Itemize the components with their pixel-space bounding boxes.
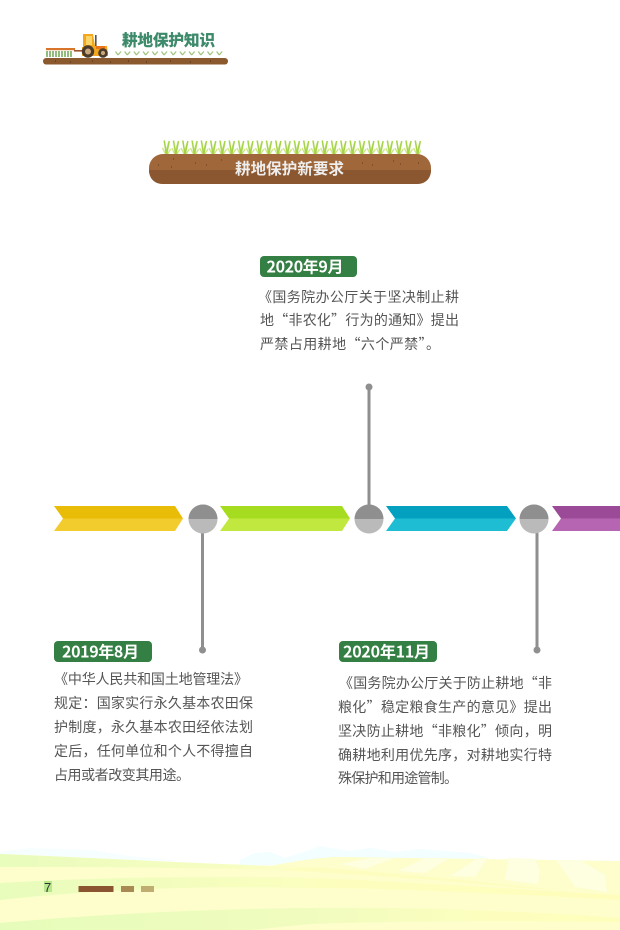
yellow arrow [54, 506, 183, 531]
footer landscape [0, 846, 620, 930]
icon: tractor with plough [46, 34, 108, 58]
description: 《国务院办公厅关于坚决制止耕 [258, 287, 459, 307]
connector: 2019 August [199, 530, 206, 654]
date badge: 2020年11月 [343, 638, 430, 662]
description: 定后，任何单位和个人不得擅自 [54, 741, 253, 761]
connector: 2020 September [366, 384, 372, 507]
purple arrow [552, 506, 620, 531]
description: 占用或者改变其用途。 [54, 765, 190, 785]
description [338, 673, 552, 788]
description: 粮化”稳定粮食生产的意见》提出 [338, 697, 552, 717]
timeline [54, 384, 620, 654]
description: 坚决防止耕地“非粮化”倾向，明 [338, 721, 552, 741]
event: 2020 September [258, 254, 459, 354]
description: 规定：国家实行永久基本农田保 [54, 693, 253, 713]
banner soil [149, 154, 431, 184]
banner grass [162, 139, 421, 155]
green arrow [220, 506, 350, 531]
date badge: 2020年9月 [266, 254, 344, 278]
header soil bar [43, 58, 228, 64]
description: 护制度，永久基本农田经依法划 [54, 717, 253, 737]
event: 2020 November [338, 638, 552, 788]
node 1 [188, 504, 218, 534]
header: tractor and title [43, 28, 228, 64]
description [258, 287, 459, 354]
date badge: 2019年8月 [62, 638, 139, 662]
connector: 2020 November [534, 530, 540, 654]
header sprouts [114, 50, 224, 56]
footer page marks [78, 886, 154, 892]
description: 确耕地利用优先序，对耕地实行特 [338, 745, 552, 765]
event: 2019 August [54, 638, 253, 785]
banner title: 耕地保护新要求 [235, 157, 344, 179]
description: 殊保护和用途管制。 [338, 768, 458, 788]
description: 《中华人民共和国土地管理法》 [54, 669, 248, 689]
blue arrow [386, 506, 516, 531]
page number: 7 [44, 880, 51, 895]
node 3 [520, 504, 548, 534]
description: 《国务院办公厅关于防止耕地“非 [339, 673, 552, 693]
header title: 耕地保护知识 [122, 28, 215, 50]
section banner [149, 139, 431, 184]
node 2 [354, 504, 384, 534]
description: 严禁占用耕地“六个严禁”。 [260, 334, 440, 354]
description [54, 669, 253, 785]
description: 地“非农化”行为的通知》提出 [260, 310, 459, 330]
